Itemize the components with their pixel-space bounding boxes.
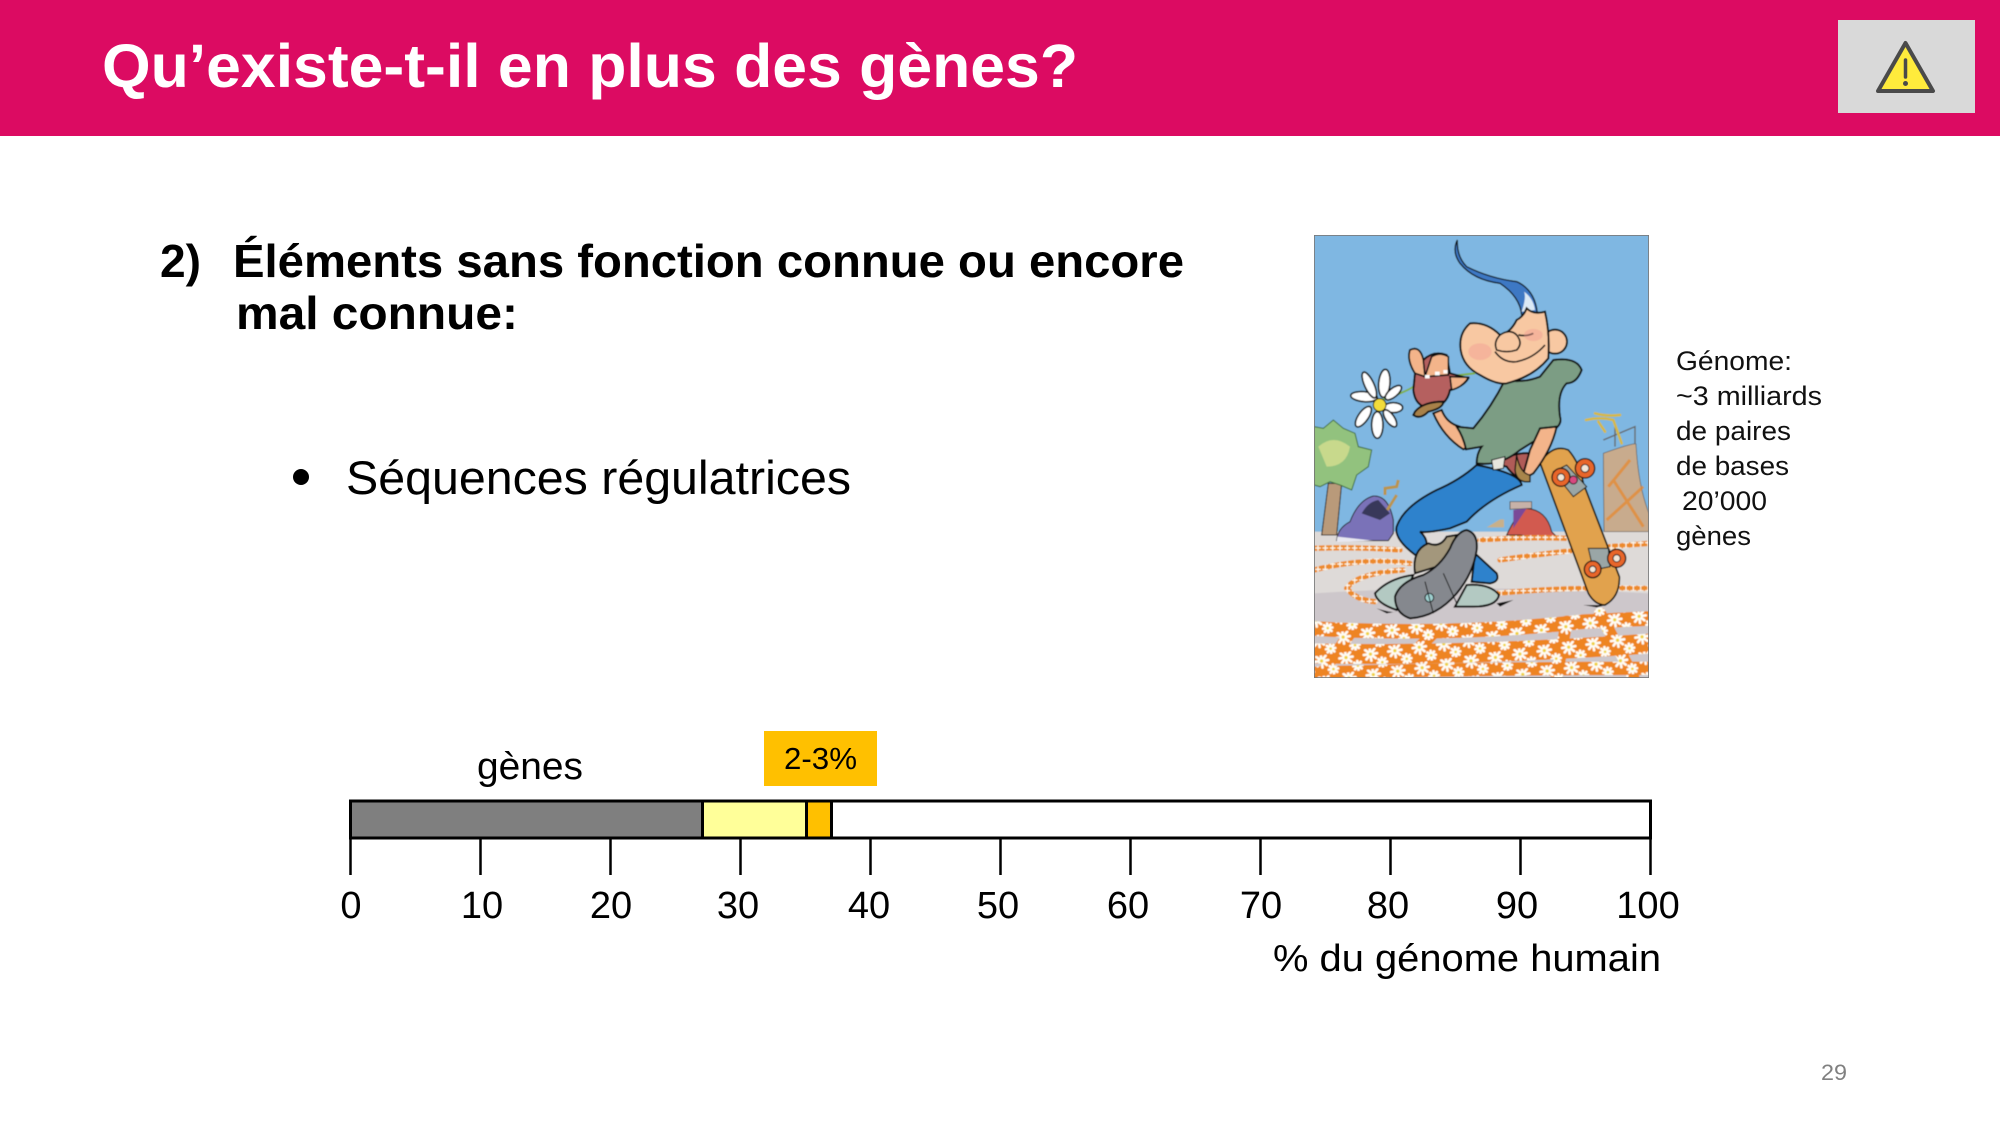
axis title: % du génome humain	[1273, 938, 1661, 980]
heading: 2)	[160, 235, 201, 287]
page number: 29	[1821, 1060, 1847, 1085]
ramp	[1603, 444, 1649, 532]
title: Qu’existe-t-il en plus des gènes?	[102, 32, 1078, 100]
character torso and hoodie	[1433, 359, 1582, 482]
heading: mal connue:	[236, 287, 518, 339]
heading	[160, 235, 1184, 339]
axis numbers	[340, 885, 1680, 927]
axis numbers: 50	[977, 885, 1019, 927]
header banner	[0, 0, 2000, 136]
tree	[1322, 483, 1342, 535]
callout: 2-3%: 2-3%	[784, 741, 857, 776]
genome note: de bases	[1676, 451, 1789, 481]
heading: Éléments sans fonction connue ou encore	[233, 235, 1184, 287]
hand and flower	[1350, 349, 1475, 438]
skateboard	[1540, 448, 1626, 605]
axis numbers: 80	[1367, 885, 1409, 927]
cartoon illustration	[1314, 235, 1649, 678]
head	[1460, 308, 1567, 384]
bar segments	[350, 801, 1650, 838]
genome note: gènes	[1676, 521, 1751, 551]
shadows near the feet	[1377, 600, 1607, 613]
axis numbers: 90	[1496, 885, 1538, 927]
axis ticks	[350, 838, 1650, 875]
icon: warning sign	[1838, 20, 1975, 113]
genome note: Génome:	[1676, 346, 1792, 376]
axis numbers: 70	[1240, 885, 1282, 927]
axis numbers: 100	[1616, 885, 1680, 927]
label: gènes: gènes	[477, 746, 583, 788]
sky	[1314, 235, 1649, 678]
genome bar chart	[340, 801, 1680, 927]
axis numbers: 10	[461, 885, 503, 927]
axis numbers: 60	[1107, 885, 1149, 927]
daisy paths on ground	[1310, 538, 1653, 677]
person bent over	[1507, 508, 1557, 538]
ground	[1314, 532, 1649, 678]
axis numbers: 30	[717, 885, 759, 927]
callout: 2-3%	[764, 731, 877, 786]
car	[1337, 496, 1393, 541]
background scene	[1314, 413, 1649, 542]
genome note: de paires	[1676, 416, 1791, 446]
axis numbers: 40	[848, 885, 890, 927]
genome note: 20’000	[1682, 486, 1767, 516]
axis numbers: 20	[590, 885, 632, 927]
axis numbers: 0	[340, 885, 362, 927]
genome note	[1676, 346, 1822, 551]
bullet item: Séquences régulatrices	[346, 451, 851, 504]
genome note: ~3 milliards	[1676, 381, 1822, 411]
character legs	[1375, 465, 1522, 618]
hair	[1455, 240, 1537, 315]
